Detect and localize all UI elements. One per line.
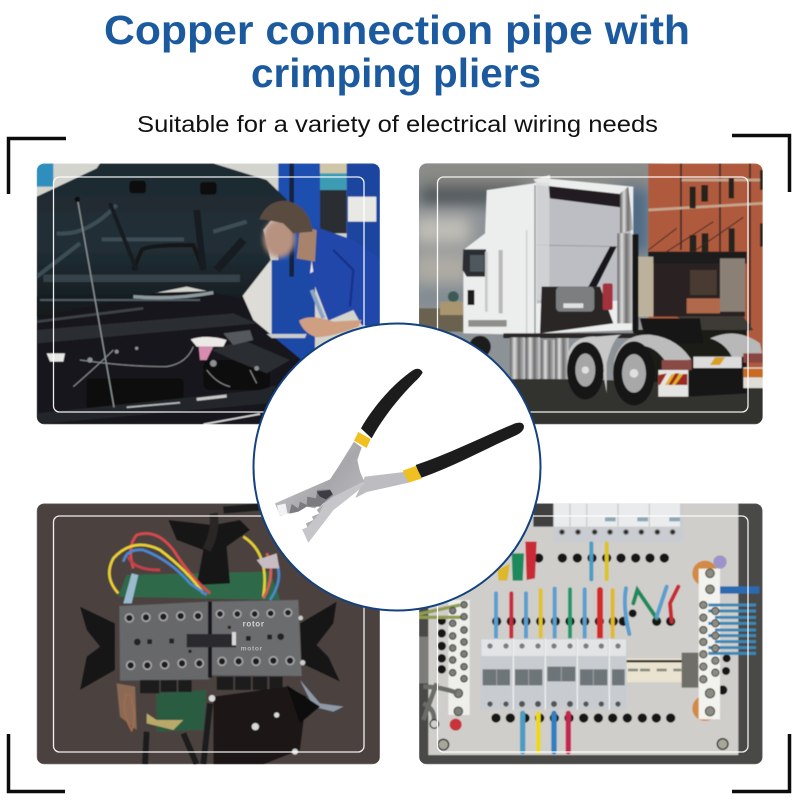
photo panel: car engine and mechanic: [37, 163, 380, 424]
left black bracket: [80, 607, 115, 690]
corner bracket: bottom right: [732, 734, 790, 792]
corner bracket: top left: [8, 138, 66, 194]
top black connector: [168, 520, 250, 585]
photo panel: contactor wiring: [37, 503, 380, 764]
right black bracket: [300, 602, 340, 682]
centre circle: [254, 324, 540, 610]
panel holes: [437, 553, 731, 723]
contactor text: rotor: rotor: [243, 620, 265, 629]
photo panel: distribution board: [419, 503, 763, 764]
lower terminals and cables: [140, 677, 283, 693]
pliers lower handle: [416, 423, 524, 478]
pliers lower yellow band: [403, 466, 422, 483]
pliers bright jaw tip: [277, 504, 288, 516]
green circuit board: [118, 572, 280, 600]
inner frame: distribution board photo: [438, 516, 748, 752]
title: crimping pliers: [251, 50, 541, 96]
title: [104, 7, 690, 96]
subtitle: Suitable for a variety of electrical wiring needs: [137, 111, 658, 137]
inner frame: truck photo: [438, 177, 748, 412]
contactor body: [119, 602, 209, 681]
pliers lower jaw shade: [302, 482, 365, 543]
pliers upper yellow band: [354, 432, 371, 448]
corner bracket: top right: [732, 136, 790, 192]
left terminal bar: [448, 600, 470, 715]
right terminal bar: [692, 561, 718, 586]
coloured loop wires: [109, 533, 279, 600]
lower breakers: [480, 638, 627, 710]
pliers arm and jaws: [275, 442, 365, 543]
corner bracket: bottom left: [8, 734, 65, 792]
din rail: [626, 658, 686, 682]
pliers crimp hole: [317, 490, 333, 499]
pliers lower handle metal: [355, 472, 409, 498]
wires upper: [496, 543, 678, 752]
top breakers: [552, 504, 554, 526]
contactor text: motor: motor: [241, 646, 263, 653]
pliers crimping teeth: [289, 489, 333, 513]
icon: crimping pliers: [275, 369, 524, 543]
title: Copper connection pipe with: [104, 7, 690, 53]
inner frame: contactor photo: [54, 516, 364, 752]
pliers upper handle: [361, 369, 423, 438]
inner frame: car photo: [54, 177, 364, 412]
photo panel: white semi truck: [413, 160, 763, 424]
